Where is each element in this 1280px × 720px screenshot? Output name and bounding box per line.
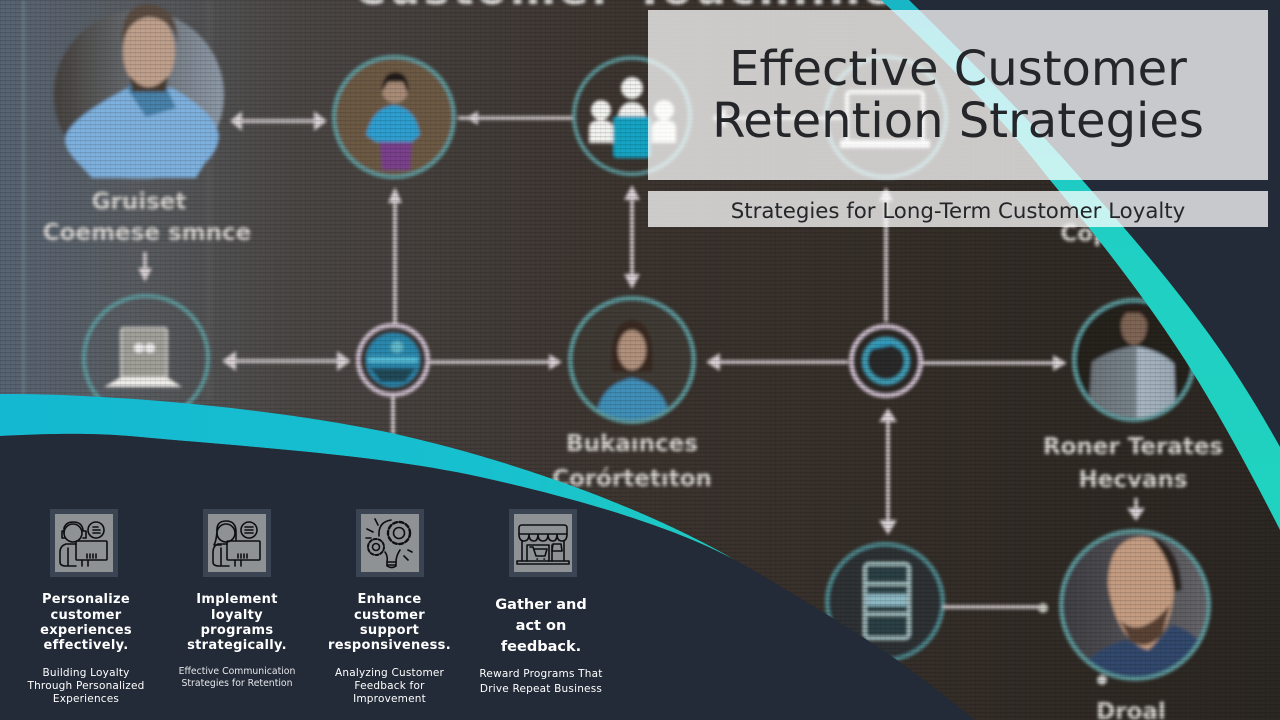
arrow (230, 111, 327, 131)
strategy 4 (479, 509, 603, 695)
heading: customer (50, 608, 122, 623)
description: Effective Communication (179, 666, 296, 677)
icon: support agent with headset (50, 509, 118, 577)
blurred label (43, 189, 251, 246)
description: Experiences (53, 693, 119, 705)
heading: strategically. (187, 638, 287, 653)
heading: Implement (196, 592, 278, 607)
heading: support (360, 623, 419, 638)
arrow (923, 355, 1067, 371)
icon: light bulb with gears (356, 509, 424, 577)
heading: act on (516, 618, 566, 634)
photo node: woman in blue top (334, 57, 454, 177)
description: Reward Programs That (479, 668, 603, 680)
blurred label: Gruiset (92, 189, 186, 215)
double arrow (222, 351, 351, 371)
arrow (430, 354, 562, 370)
heading: Personalize (42, 592, 130, 607)
heading: programs (201, 623, 273, 638)
strategy 1 (26, 509, 145, 705)
server icon node (827, 544, 943, 660)
description: Analyzing Customer (335, 667, 445, 679)
heading: Gather and (495, 597, 587, 613)
blurred label: Roner Terates (1043, 434, 1223, 460)
title panel: Retention Strategies (712, 93, 1204, 149)
top right teal curved band (881, 0, 1280, 530)
double arrow (706, 353, 848, 371)
laptop icon node behind title (826, 57, 946, 177)
heading: customer (354, 608, 425, 623)
bottom left navy panel (0, 434, 975, 720)
description: Through Personalized (26, 680, 145, 692)
description: Feedback for (354, 680, 425, 692)
photo node: woman centre (570, 298, 694, 422)
strategy 3 (328, 509, 451, 705)
subtitle: Strategies for Long-Term Customer Loyalty (731, 199, 1185, 224)
heading: feedback. (501, 639, 581, 655)
arrow (138, 252, 152, 282)
photo node: smiling bald man (1060, 530, 1210, 685)
top right navy corner (905, 0, 1280, 447)
hub node right (851, 326, 921, 396)
group icon node (574, 58, 690, 174)
description: Improvement (353, 693, 426, 705)
title panel (648, 10, 1268, 180)
icon: storefront with cart (509, 509, 577, 577)
bottom left teal curved band (0, 394, 735, 560)
strategy 2 (179, 509, 296, 689)
blurred label: Coemese smnce (43, 220, 251, 246)
icon: female support agent (203, 509, 271, 577)
double arrow vertical (879, 408, 897, 535)
connector with dot (943, 603, 1048, 613)
blurred label: Corórtetıton (552, 466, 712, 492)
blurred label (1043, 434, 1223, 493)
heading: responsiveness. (328, 638, 451, 653)
blurred label: Hecvans (1078, 467, 1188, 493)
description: Building Loyalty (42, 667, 130, 679)
arrow (712, 108, 850, 128)
heading: effectively. (44, 638, 128, 653)
heading: Enhance (357, 592, 422, 607)
blurred label: Bukaınces (566, 431, 698, 457)
arrow (458, 111, 572, 125)
blurred label fragment: Cop (1060, 221, 1110, 247)
subtitle panel (648, 191, 1268, 227)
blurred label (552, 431, 712, 492)
hub node left (358, 325, 428, 395)
laptop icon node (84, 296, 208, 420)
description: Strategies for Retention (182, 678, 293, 689)
photo node: man in blue shirt (54, 4, 224, 180)
arrow (1127, 498, 1145, 521)
vertical connectors (388, 185, 893, 440)
title: Effective Customer (729, 41, 1187, 97)
photo node: standing man (1074, 300, 1194, 420)
description: Drive Repeat Business (480, 683, 602, 695)
heading: loyalty (211, 608, 263, 623)
heading: experiences (40, 623, 132, 638)
